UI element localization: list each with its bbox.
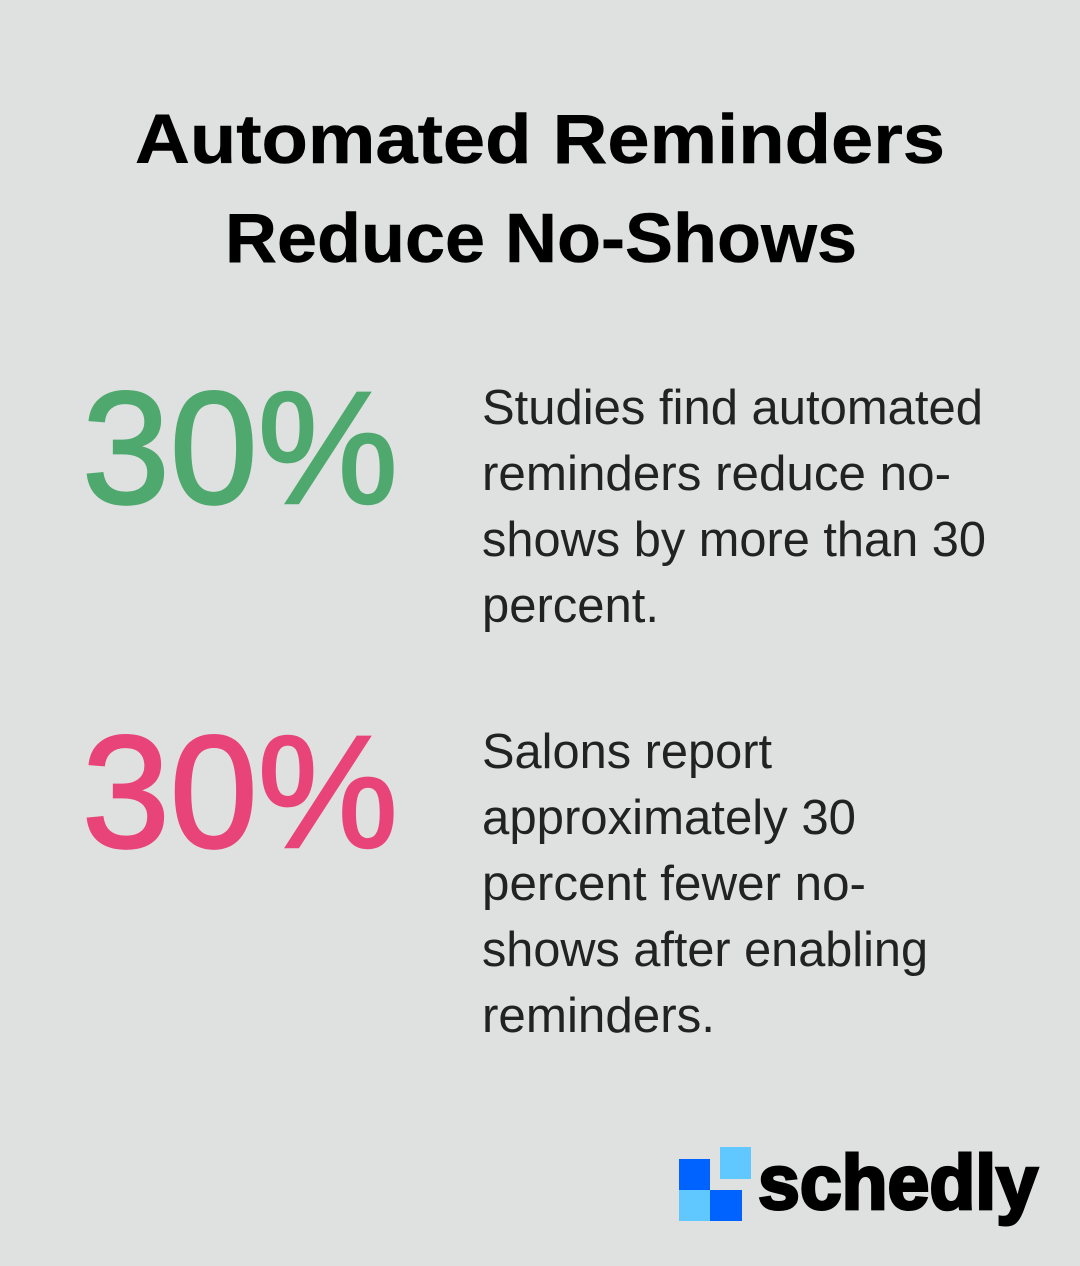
- text block: studies finding: percent.: [482, 579, 659, 633]
- text block: salons report: Salons report: [482, 725, 772, 779]
- text block: studies finding: shows by more than 30: [482, 513, 986, 567]
- text block: salons report: [482, 725, 928, 1043]
- wordmark: schedly: [758, 1140, 1038, 1226]
- text block: studies finding: Studies find automated: [482, 381, 983, 435]
- logo: schedly: [679, 1140, 1038, 1226]
- text block: studies finding: reminders reduce no-: [482, 447, 951, 501]
- title: Automated Reminders: [135, 100, 945, 178]
- text block: salons report: approximately 30: [482, 791, 856, 845]
- icon: logo squares: [679, 1147, 751, 1221]
- text block: salons report: percent fewer no-: [482, 857, 866, 911]
- stat: pink 30 percent: 30%: [82, 702, 398, 881]
- title: Reduce No-Shows: [225, 199, 857, 277]
- text block: salons report: reminders.: [482, 989, 715, 1043]
- text block: salons report: shows after enabling: [482, 923, 928, 977]
- title: [135, 100, 945, 277]
- text block: studies finding: [482, 381, 986, 633]
- stat: green 30 percent: 30%: [82, 358, 398, 537]
